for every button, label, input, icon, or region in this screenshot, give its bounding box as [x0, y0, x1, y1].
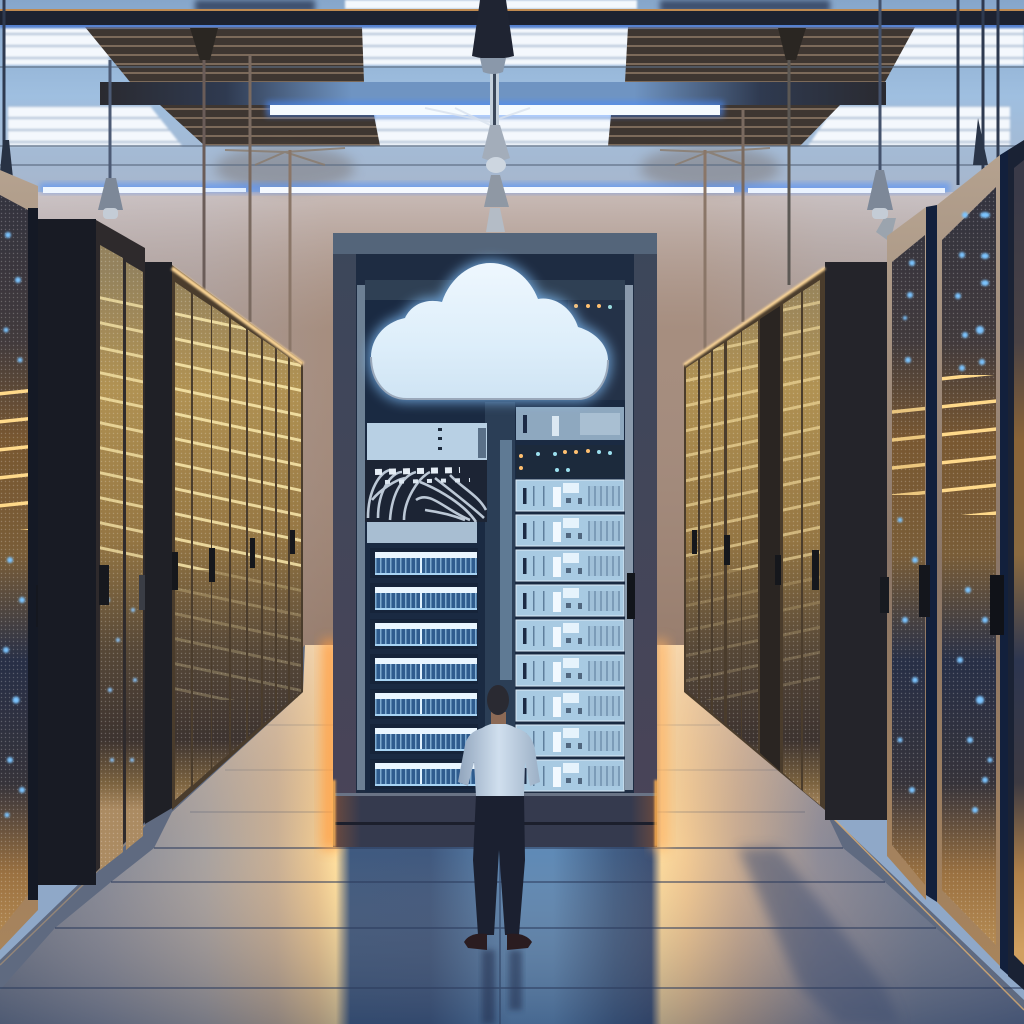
neck and head [491, 712, 506, 724]
floor margin strip [0, 645, 1024, 1024]
central server rack [322, 233, 668, 850]
back wall [0, 190, 1024, 660]
top shadows [195, 0, 315, 12]
upper equipment with lights [568, 300, 625, 400]
rack: long left row [145, 262, 304, 824]
long shadow right [738, 848, 900, 1024]
left small server [367, 522, 477, 543]
centre pendant [472, 0, 514, 232]
left upper server [367, 423, 487, 460]
cable bundle [365, 460, 487, 522]
cloud icon [371, 263, 608, 399]
ceiling brackets [190, 28, 806, 60]
fan shadows [215, 146, 355, 190]
floor [0, 645, 1024, 1024]
rack: second left [38, 219, 147, 885]
left stacked servers [370, 548, 478, 789]
left server racks [0, 170, 304, 950]
rack: second right [880, 205, 937, 902]
hanging cables and pendant lamps [0, 0, 998, 352]
rack base [335, 793, 657, 847]
ceiling with skylights [0, 0, 1024, 192]
torso and arms [458, 723, 540, 796]
recessed ceiling panels [85, 27, 915, 146]
ceiling light strips [40, 101, 950, 193]
rack handle [627, 573, 635, 619]
orange rim glow [322, 640, 338, 850]
rack: far left [0, 170, 38, 950]
person's reflection [482, 950, 495, 1024]
shoes [464, 934, 487, 950]
right server racks [684, 140, 1024, 990]
right dark unit with LEDs [516, 445, 624, 478]
glowing top edge [172, 268, 303, 364]
skylight windows [4, 0, 1024, 146]
rack interior [356, 254, 634, 794]
rack frame [333, 233, 657, 847]
legs [473, 795, 525, 935]
person viewing the rack [458, 685, 540, 950]
ceiling beams [0, 22, 1024, 28]
right stacked servers [516, 480, 624, 791]
floor tile seams [0, 725, 1024, 1024]
rack: near right [937, 140, 1024, 990]
ceiling fans [225, 108, 770, 165]
right upper unit [516, 407, 624, 440]
rack side mesh strips [357, 285, 365, 790]
rack: long right row [684, 262, 887, 820]
